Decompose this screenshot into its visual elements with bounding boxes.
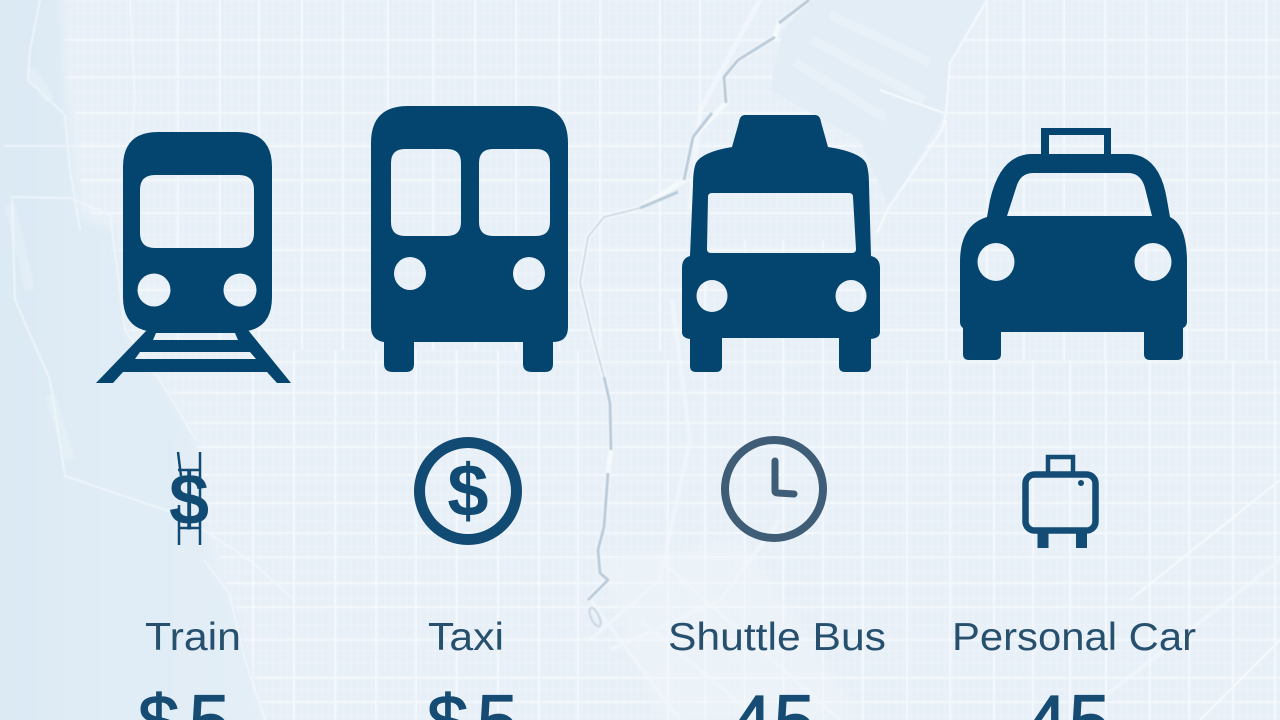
downtown diagonals xyxy=(590,300,1280,720)
label: Shuttle Bus: Shuttle Bus xyxy=(668,616,886,659)
label: Train: Train xyxy=(145,616,241,659)
icon: train xyxy=(96,132,291,383)
shoreline strokes xyxy=(4,0,294,720)
icon: dollar coin: $ xyxy=(447,449,489,532)
rail yard lighter area xyxy=(770,0,987,207)
icon: train tracks xyxy=(96,330,291,383)
label: Personal Car: Personal Car xyxy=(952,616,1196,659)
icon: luggage xyxy=(1026,457,1096,548)
icon: clock xyxy=(725,440,823,538)
icon: bus xyxy=(371,106,568,372)
icon: personal car xyxy=(960,128,1187,360)
water xyxy=(0,0,268,720)
label: Taxi: Taxi xyxy=(428,616,504,659)
icon: broken dollar sign: $ xyxy=(169,460,209,540)
icon: shuttle bus xyxy=(682,115,880,372)
icon: dollar coin xyxy=(420,442,516,540)
river xyxy=(580,0,809,600)
